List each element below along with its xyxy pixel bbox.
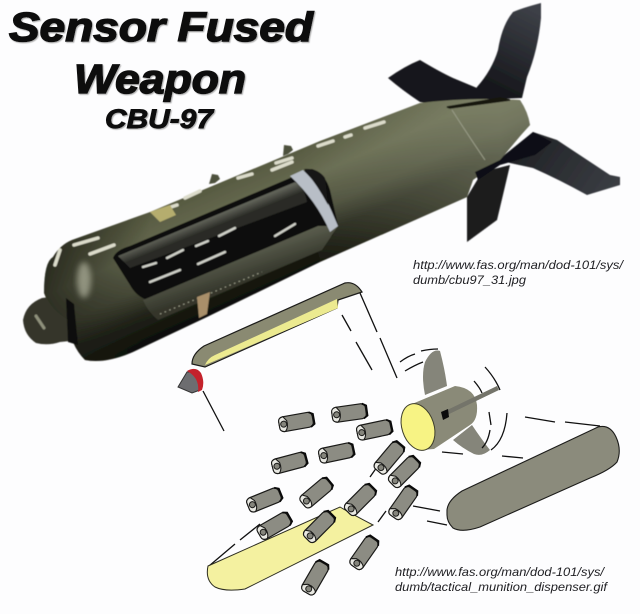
rod slot [441,409,449,420]
dark window behind liner [304,169,328,205]
title [9,4,314,134]
tail canister [395,349,523,458]
red ring [187,369,203,392]
bomb body [44,99,530,361]
submunition 15 [300,559,330,596]
canister top fin [423,350,447,395]
submunition 6 [372,439,406,476]
submunition 5 [271,451,308,475]
source URL: bomb photo [413,259,625,287]
tan band [197,292,210,318]
arm outer strip [192,283,362,367]
rod [444,388,498,414]
submunition highlights [143,224,295,282]
white bay liner [290,170,338,232]
yellow tray [207,507,373,590]
submunitions [245,403,422,596]
nose cone [178,372,200,393]
yellow band [150,205,176,222]
shell assembly dashes [413,417,600,525]
submunition 12 [256,511,293,541]
submunition 4 [318,442,355,464]
submunition 1 [278,411,315,432]
URL line 1: http://www.fas.org/man/dod-101/sys/ [413,259,625,272]
top marker dashes [55,122,384,265]
submunition 3 [356,419,393,441]
source URL: dispenser diagram [395,566,609,594]
subtitle: CBU-97: CBU-97 [105,104,215,134]
submunition 8 [387,484,419,521]
tail shading [300,99,530,262]
tail fin: top [470,3,541,100]
submunition 14 [348,534,380,571]
motion arcs and dashes [400,349,523,458]
upper submunition cylinder [118,182,307,268]
tail fin: right [498,132,620,195]
neck shadow [66,298,78,345]
tail seam [452,110,485,160]
assembly lines [203,293,397,566]
submunition 9 [298,476,335,510]
submunition 2 [331,403,368,423]
tail fin root [475,132,552,180]
submunition 11 [343,482,378,517]
rivets [160,272,262,314]
tail fin: bottom [467,165,510,242]
URL line 1: http://www.fas.org/man/dod-101/sys/ [395,566,606,579]
canister barrel [412,386,477,450]
arm yellow strip [205,299,338,365]
URL line 2: dumb/tactical_munition_dispenser.gif [395,581,609,594]
lower submunition cylinder [143,226,338,320]
strake arm [178,283,362,393]
submunition 10 [245,486,283,513]
illustration: CBU-97 bomb with open bay [23,3,620,361]
URL line 2: dumb/cbu97_31.jpg [413,274,527,287]
nose highlight [77,262,91,298]
submunition 7 [387,454,422,489]
nose cap highlight [36,316,44,328]
yellow end [395,399,441,455]
bay interior [113,169,338,300]
open bay [113,169,338,320]
nose shading [44,212,150,361]
tail fin: left [388,60,482,107]
lugs [209,145,293,184]
dispenser shell [447,426,619,530]
tail slot [447,98,510,108]
canister bottom fin [453,425,490,455]
title line: Weapon: Weapon [74,56,246,102]
exploded diagram [178,283,619,596]
title line: Sensor Fused: Sensor Fused [9,4,314,50]
nose cap [23,298,80,344]
submunition 13 [302,509,337,544]
